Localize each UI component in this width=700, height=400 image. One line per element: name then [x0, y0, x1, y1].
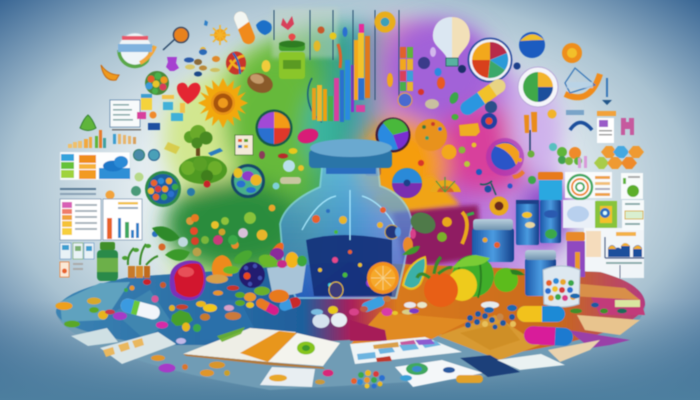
icon: bead ball: [145, 71, 169, 95]
icon: bead pile: [351, 370, 385, 388]
figure: translucent human body: [280, 139, 412, 298]
icon: colour strip column: [400, 47, 413, 91]
icon: gold block: [459, 123, 480, 136]
document: swirl panel: [565, 172, 612, 199]
small green-side items: [164, 135, 304, 196]
icon: sunflower: [198, 78, 248, 128]
floor pills lower: [151, 338, 334, 384]
icon: yellow blue capsule: [517, 306, 565, 322]
icon cluster: circles and bars: [557, 147, 587, 168]
icon: orange slice: [212, 255, 233, 277]
figure: lower belly organ: [306, 235, 392, 296]
orange half: [367, 262, 399, 294]
floor pills left: [56, 279, 245, 332]
document: top notes: [110, 100, 140, 127]
icon: bottle cap head: [309, 139, 392, 174]
warm-side beads: [418, 142, 536, 195]
small dots above chart: [281, 16, 348, 52]
icon: yellow gourd: [262, 60, 270, 72]
icon: heart: [177, 83, 200, 104]
panel: chart and right orange-purple side: [274, 10, 582, 216]
seed cluster: [184, 20, 220, 76]
small flowchart tiles: [137, 94, 185, 130]
icon: pie chart blue ring: [468, 38, 512, 82]
panel: left documents and mini charts: [60, 94, 185, 277]
icon: tall blue jar: [538, 172, 563, 200]
card: swatch sheet: [350, 337, 462, 364]
icon: glass bowl with capsules: [257, 240, 307, 295]
icon: sun: [210, 25, 230, 45]
icon: blue orange ball: [486, 138, 524, 176]
chart: coloured bar cluster: [274, 10, 399, 122]
icon: plant pots: [122, 244, 158, 278]
icon: green gourds: [206, 248, 254, 284]
icon: gold rosette: [490, 196, 508, 216]
icon: banana: [101, 65, 119, 80]
icon: white orange capsule: [232, 10, 257, 46]
icon: tree: [184, 125, 212, 156]
icon: green bush: [179, 156, 227, 188]
round icons: [60, 150, 160, 200]
icon: multicolour egg: [226, 52, 246, 74]
figure: chest lines: [302, 190, 396, 240]
card: chart sheet: [395, 360, 483, 387]
icon: magenta blue capsule: [524, 326, 573, 346]
card: book-side note: [260, 367, 315, 387]
icon: purple flask: [166, 57, 179, 71]
document: colour panels and cloud: [60, 152, 130, 180]
panel: floor mat with documents: [56, 262, 645, 390]
icon: pie chart with ring: [256, 110, 292, 146]
icon: peach: [417, 257, 458, 307]
icon tiles: [60, 243, 94, 277]
icon: lemon: [447, 269, 477, 301]
icon: gold gear: [374, 12, 396, 32]
panel: right documents and mini charts: [557, 68, 644, 278]
icon: orange cookie: [415, 119, 447, 151]
icon: blue fruit: [256, 20, 272, 35]
icon: blue jar lower: [525, 250, 556, 296]
icon: bowl of blue beads: [145, 171, 181, 207]
icon: apple: [170, 261, 206, 301]
document: bar chart: [103, 199, 142, 240]
icon: orange fan: [430, 177, 461, 192]
icon: white pills: [311, 306, 347, 328]
icon: blue purple disc: [392, 168, 422, 198]
icon: grey bottle silhouette: [365, 150, 381, 176]
icon: blue green leaf fruit: [403, 257, 426, 289]
icon: lightbulb: [433, 17, 470, 66]
figure: blue torso: [280, 167, 412, 298]
icon: blue yellow ball: [519, 32, 545, 58]
icon: pie chart dark ring: [376, 118, 410, 152]
small purple-side balls: [387, 47, 557, 158]
icon: pink capsule: [296, 127, 320, 145]
icon: circle logo: [118, 33, 155, 67]
icon: green jar: [279, 40, 305, 79]
panel: central fruit and pills: [56, 200, 627, 388]
card: lower pale sheet: [497, 354, 565, 370]
diagram: arc chart: [565, 68, 612, 105]
icon: orange tube: [566, 232, 585, 277]
central pills: [235, 286, 302, 317]
icon: magnifier: [163, 28, 188, 50]
document: arc note: [566, 110, 634, 143]
panel: green nature side: [97, 10, 320, 281]
icon: green pepper: [452, 255, 494, 298]
icon: big blue jar: [472, 219, 514, 262]
card: dark blue sheet: [460, 355, 520, 377]
icon: tall jars: [516, 200, 561, 245]
icon: berries: [239, 262, 265, 288]
icon: green bottle: [97, 242, 118, 281]
icon: blue yellow capsule: [458, 76, 508, 118]
organ dots: [312, 207, 399, 298]
icon: green triangle badge: [80, 115, 96, 130]
panel: small documents: [563, 200, 644, 230]
icon: open book: [183, 327, 340, 369]
icon: orange hexagon row: [594, 146, 644, 169]
icon: green apple: [494, 268, 525, 292]
document: colour table: [60, 199, 101, 240]
floor pills right: [349, 294, 627, 330]
icon: orange target: [562, 43, 582, 63]
chart: small doc bars: [112, 129, 141, 144]
chart: small orange bars: [68, 130, 106, 148]
icon: blue white capsule: [119, 297, 161, 321]
icon: bowl of beads dark: [231, 164, 265, 198]
icon: glass jar of beads: [543, 266, 580, 307]
icon: brown almond: [245, 70, 275, 96]
card: floor panels: [60, 282, 645, 364]
icon: yellow ball: [442, 144, 456, 160]
lower green spheres: [152, 204, 276, 261]
panel: colourful central wash: [165, 8, 570, 290]
leaf motifs on dark panel: [395, 208, 474, 255]
document: plant note: [621, 173, 643, 199]
icon: pie chart white ring: [518, 67, 558, 107]
chart: area peaks: [584, 228, 644, 278]
